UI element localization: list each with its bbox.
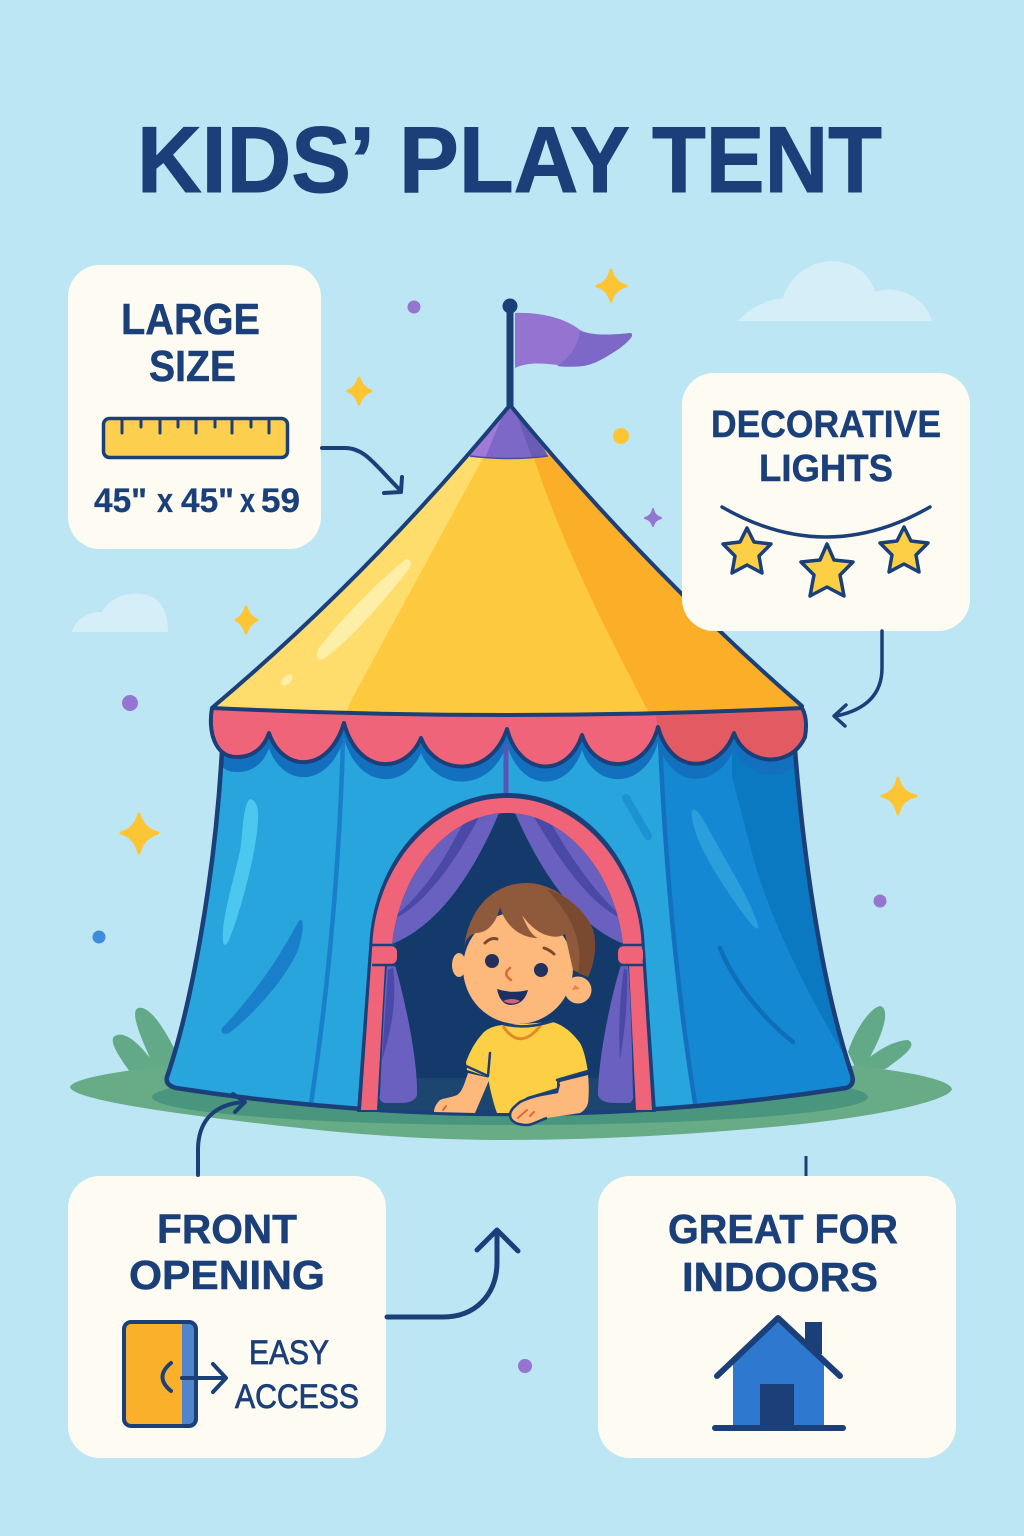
arrow: front opening to tent base	[198, 1094, 245, 1175]
title: ’	[349, 107, 375, 212]
heading: great for indoors: GREAT FOR	[668, 1206, 898, 1252]
title: TENT	[652, 107, 882, 212]
tie backs	[372, 945, 643, 965]
hair	[464, 883, 595, 977]
dimensions: x	[240, 482, 255, 520]
label: easy access: EASY	[249, 1334, 329, 1372]
heading: great for indoors: INDOORS	[682, 1254, 878, 1300]
arrow: front opening upward	[387, 1230, 518, 1317]
heading: front opening: OPENING	[129, 1252, 325, 1298]
shirt hems	[466, 1053, 588, 1080]
heading: great for indoors	[668, 1206, 898, 1300]
panel: decorative lights	[682, 373, 970, 631]
upper curtains	[392, 813, 623, 944]
valance connector	[504, 745, 508, 796]
brows	[485, 938, 554, 954]
door opening	[357, 793, 656, 1112]
dimensions: 45"	[181, 482, 234, 520]
eyes	[485, 954, 548, 977]
chin line	[503, 1021, 553, 1026]
dimensions: 59	[261, 482, 300, 520]
icon: ruler	[104, 418, 288, 458]
sparkles and dots	[92, 270, 916, 1373]
mouth	[497, 989, 528, 1005]
panel: front opening	[68, 1176, 386, 1458]
ground	[70, 1064, 952, 1140]
heading: large size: LARGE	[121, 295, 260, 344]
title: PLAY	[399, 107, 630, 212]
cloud: left	[72, 594, 168, 632]
tent body	[164, 730, 856, 1116]
heading: large size	[121, 295, 260, 391]
heading: large size: SIZE	[149, 342, 236, 391]
heading: decorative lights	[711, 404, 941, 490]
grass tufts	[113, 1006, 911, 1078]
shirt	[466, 1022, 588, 1113]
ear shade	[572, 985, 580, 990]
collar	[503, 1025, 541, 1039]
label: easy access	[235, 1334, 359, 1416]
lower right curtain	[598, 965, 633, 1103]
arrow: lights to valance	[834, 631, 882, 726]
scalloped valance	[211, 708, 806, 767]
label: easy access: ACCESS	[235, 1378, 359, 1416]
arrow stub: indoors	[804, 1156, 808, 1176]
title	[137, 107, 882, 212]
ears	[452, 953, 592, 1004]
tent roof	[211, 406, 804, 713]
icon: door	[124, 1322, 226, 1426]
roof highlights	[317, 559, 411, 660]
panel: great for indoors	[598, 1176, 956, 1458]
child	[434, 883, 595, 1125]
flag pole	[502, 298, 518, 406]
lower left curtain	[380, 965, 417, 1103]
nose	[506, 968, 511, 980]
dimensions: 45"	[94, 482, 147, 520]
heading: decorative lights: DECORATIVE	[711, 404, 941, 446]
left arm	[434, 1073, 490, 1113]
tent highlights	[222, 798, 793, 1042]
flag	[515, 313, 632, 368]
arrow: large size to roof	[322, 448, 402, 493]
icon: string of stars	[722, 507, 930, 596]
face	[463, 912, 573, 1024]
heading: front opening: FRONT	[157, 1206, 297, 1252]
dimensions	[94, 482, 300, 520]
panel: large size	[68, 265, 321, 549]
fingers	[443, 1106, 534, 1118]
dimensions: x	[157, 482, 173, 520]
tent	[150, 298, 870, 1140]
valance shadow	[223, 730, 760, 782]
right arm	[510, 1075, 589, 1125]
icon: house	[715, 1318, 843, 1428]
heading: decorative lights: LIGHTS	[759, 448, 893, 490]
cloud: top right	[738, 261, 932, 321]
heading: front opening	[129, 1206, 325, 1298]
title: KIDS	[137, 107, 351, 212]
ground shadow	[152, 1069, 868, 1125]
